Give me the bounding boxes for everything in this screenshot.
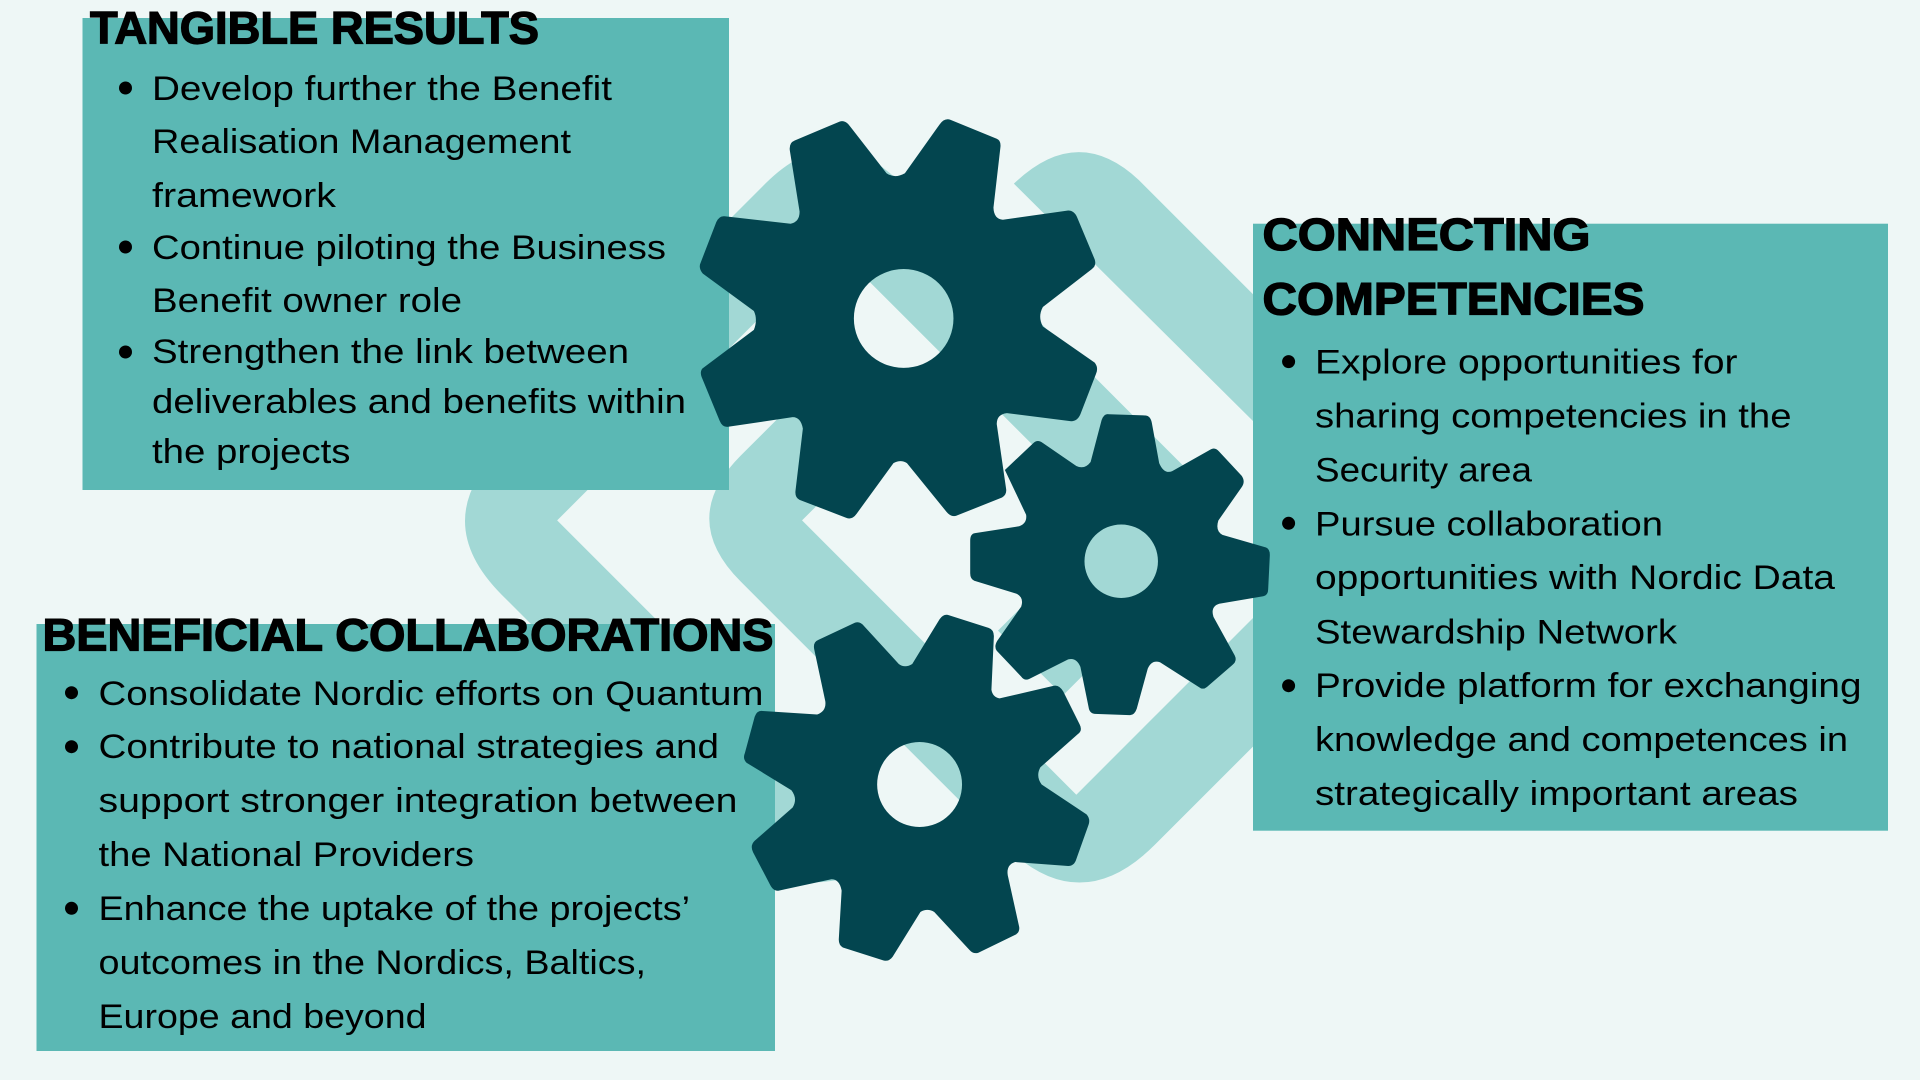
icon: large gear (700, 119, 1097, 518)
heading: connecting competencies: COMPETENCIES (1262, 274, 1644, 324)
panel: tangible results (82, 2, 729, 490)
bullet list: tangible results: Realisation Management (152, 123, 572, 161)
bullet list: beneficial collaborations: outcomes in the Nordics, Baltics, (98, 944, 646, 982)
panel: connecting competencies (1253, 209, 1888, 831)
heading: connecting competencies: CONNECTING (1262, 209, 1590, 260)
bullet list: beneficial collaborations (65, 675, 764, 1036)
bullet list: tangible results: framework (152, 177, 337, 215)
bullet list: connecting competencies: Security area (1315, 452, 1532, 490)
bullet list: connecting competencies: sharing competencies in the (1315, 397, 1792, 435)
bullet list: connecting competencies: knowledge and competences in (1315, 721, 1848, 759)
heading: beneficial collaborations: BENEFICIAL COLLABORATIONS (42, 610, 774, 660)
bullet list: beneficial collaborations: the National Providers (98, 836, 474, 874)
bullet list: tangible results: the projects (152, 433, 350, 471)
bullet list: connecting competencies: Stewardship Network (1315, 614, 1678, 652)
bullet list: beneficial collaborations: Enhance the uptake of the projects’ (98, 890, 690, 928)
bullet list: beneficial collaborations: Contribute to national strategies and (98, 728, 719, 766)
bullet list: tangible results: Develop further the Benefit (152, 70, 613, 108)
background watermark: interlocking chevron logo (465, 149, 1479, 883)
heading: connecting competencies (1262, 209, 1644, 324)
icon: lower gear (744, 615, 1089, 961)
bullet list: tangible results: deliverables and benefits within (152, 383, 686, 421)
icon: small gear (970, 414, 1270, 715)
bullet list: connecting competencies: Pursue collaboration (1315, 506, 1663, 544)
gears illustration (700, 119, 1270, 961)
bullet list: connecting competencies: opportunities with Nordic Data (1315, 559, 1835, 597)
bullet list: connecting competencies: strategically important areas (1315, 775, 1798, 813)
panel: beneficial collaborations (36, 610, 775, 1051)
bullet list: connecting competencies: Explore opportunities for (1315, 344, 1738, 382)
bullet list: tangible results: Benefit owner role (152, 282, 462, 320)
bullet list: connecting competencies (1282, 344, 1862, 813)
bullet list: tangible results (119, 70, 686, 471)
bullet list: beneficial collaborations: Consolidate Nordic efforts on Quantum (98, 675, 764, 713)
bullet list: beneficial collaborations: Europe and beyond (98, 998, 426, 1036)
bullet list: tangible results: Continue piloting the Business (152, 229, 666, 267)
bullet list: tangible results: Strengthen the link between (152, 333, 629, 371)
bullet list: beneficial collaborations: support stronger integration between (98, 782, 738, 820)
heading: tangible results: TANGIBLE RESULTS (90, 2, 539, 54)
bullet list: connecting competencies: Provide platform for exchanging (1315, 667, 1862, 705)
